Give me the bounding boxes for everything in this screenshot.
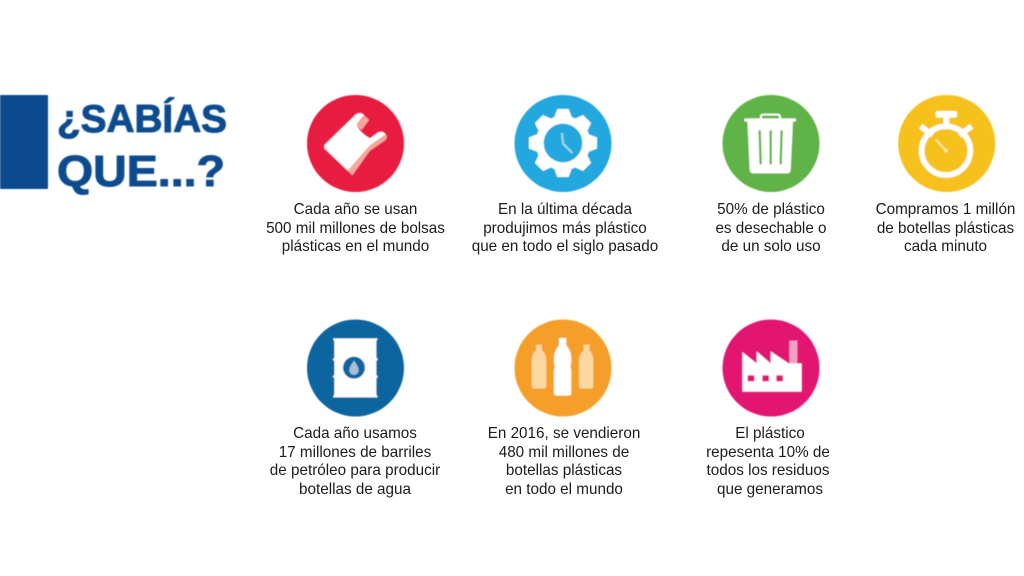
caption: El plástico (735, 425, 805, 442)
icon: factory (722, 320, 820, 416)
icon: three bottles (514, 320, 612, 416)
caption: cada minuto (904, 238, 987, 255)
caption: repesenta 10% de (706, 444, 830, 461)
caption: En la última década (498, 201, 632, 218)
caption: Cada año se usan (294, 201, 417, 218)
icon: stopwatch (898, 95, 995, 192)
item: bottles sold (488, 320, 640, 498)
caption: que en todo el siglo pasado (472, 238, 658, 255)
caption: que generamos (717, 481, 823, 498)
icon: gear with clock (514, 95, 612, 192)
caption: botellas plásticas (506, 462, 622, 479)
caption: de un solo uso (721, 238, 821, 255)
item: plastic waste (706, 320, 830, 498)
caption: botellas de agua (299, 481, 411, 498)
caption: 17 millones de barriles (279, 444, 432, 461)
icon: trash can (722, 95, 820, 192)
caption: En 2016, se vendieron (488, 425, 640, 442)
heading: ¿SABÍAS QUE...? (57, 97, 227, 196)
caption: 50% de plástico (717, 201, 825, 218)
caption: todos los residuos (707, 462, 830, 479)
caption: Cada año usamos (293, 425, 417, 442)
caption: Compramos 1 millón (876, 201, 1015, 218)
caption: de botellas plásticas (877, 220, 1015, 237)
item: plastic production (472, 95, 658, 255)
caption: produjimos más plástico (483, 220, 647, 237)
item: single use plastic (715, 95, 827, 255)
icon: oil barrel (307, 320, 404, 416)
caption: 500 mil millones de bolsas (266, 220, 445, 237)
item: oil barrels (270, 320, 440, 498)
heading: ¿SABÍAS QUE...?: ¿SABÍAS (57, 97, 227, 141)
caption: plásticas en el mundo (282, 238, 429, 255)
item: plastic bags (266, 95, 445, 255)
caption: de petróleo para producir (270, 462, 440, 479)
heading: ¿SABÍAS QUE...?: QUE...? (57, 147, 225, 196)
icon: plastic bag (307, 95, 404, 192)
caption: es desechable o (715, 220, 827, 237)
caption: en todo el mundo (505, 481, 623, 498)
item: bottles per minute (876, 95, 1015, 255)
caption: 480 mil millones de (499, 444, 629, 461)
blue accent bar (0, 95, 48, 189)
title block (0, 95, 227, 196)
